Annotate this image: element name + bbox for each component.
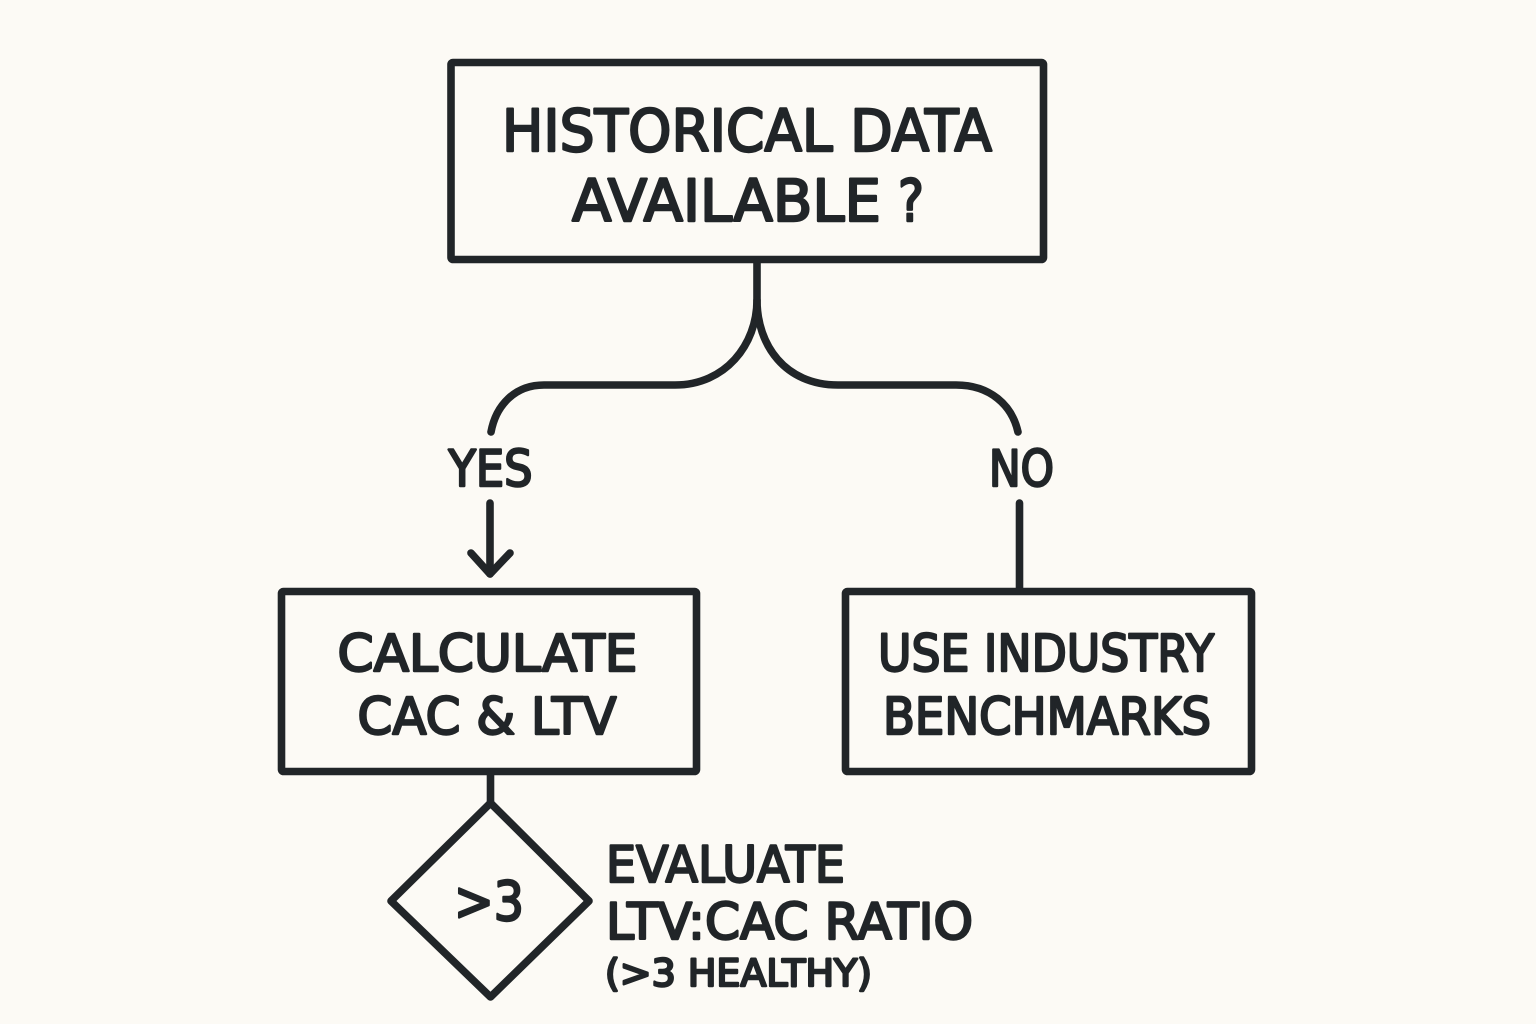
decision box: historical data available: ? <box>898 167 924 235</box>
diamond: greater than 3 <box>391 803 589 997</box>
box: use industry benchmarks: BENCHMARKS <box>883 688 1211 747</box>
arrow: yes to calculate <box>471 503 510 574</box>
text: evaluate ltv:cac ratio: LTV:CAC RATIO <box>606 893 973 951</box>
decision box: historical data available: HISTORICAL DATA <box>502 97 992 165</box>
text: evaluate ltv:cac ratio <box>605 836 973 995</box>
text: evaluate ltv:cac ratio: EVALUATE <box>606 836 845 894</box>
decision box: historical data available: AVAILABLE <box>572 167 881 235</box>
box: calculate cac and ltv: CAC & LTV <box>358 688 617 747</box>
box: use industry benchmarks <box>846 592 1252 772</box>
box: calculate cac and ltv <box>282 592 696 772</box>
box: use industry benchmarks: USE INDUSTRY <box>878 625 1215 684</box>
line: no to benchmarks <box>1016 503 1023 590</box>
label: yes: YES <box>448 440 532 498</box>
box: calculate cac and ltv: CALCULATE <box>338 625 638 684</box>
decision box: historical data available <box>451 62 1044 260</box>
text: evaluate ltv:cac ratio: (>3 HEALTHY) <box>605 952 872 995</box>
label: no: NO <box>989 440 1054 498</box>
diamond: greater than 3: >3 <box>454 870 524 933</box>
branching connector <box>491 262 1018 432</box>
line: calculate to diamond <box>487 772 494 803</box>
